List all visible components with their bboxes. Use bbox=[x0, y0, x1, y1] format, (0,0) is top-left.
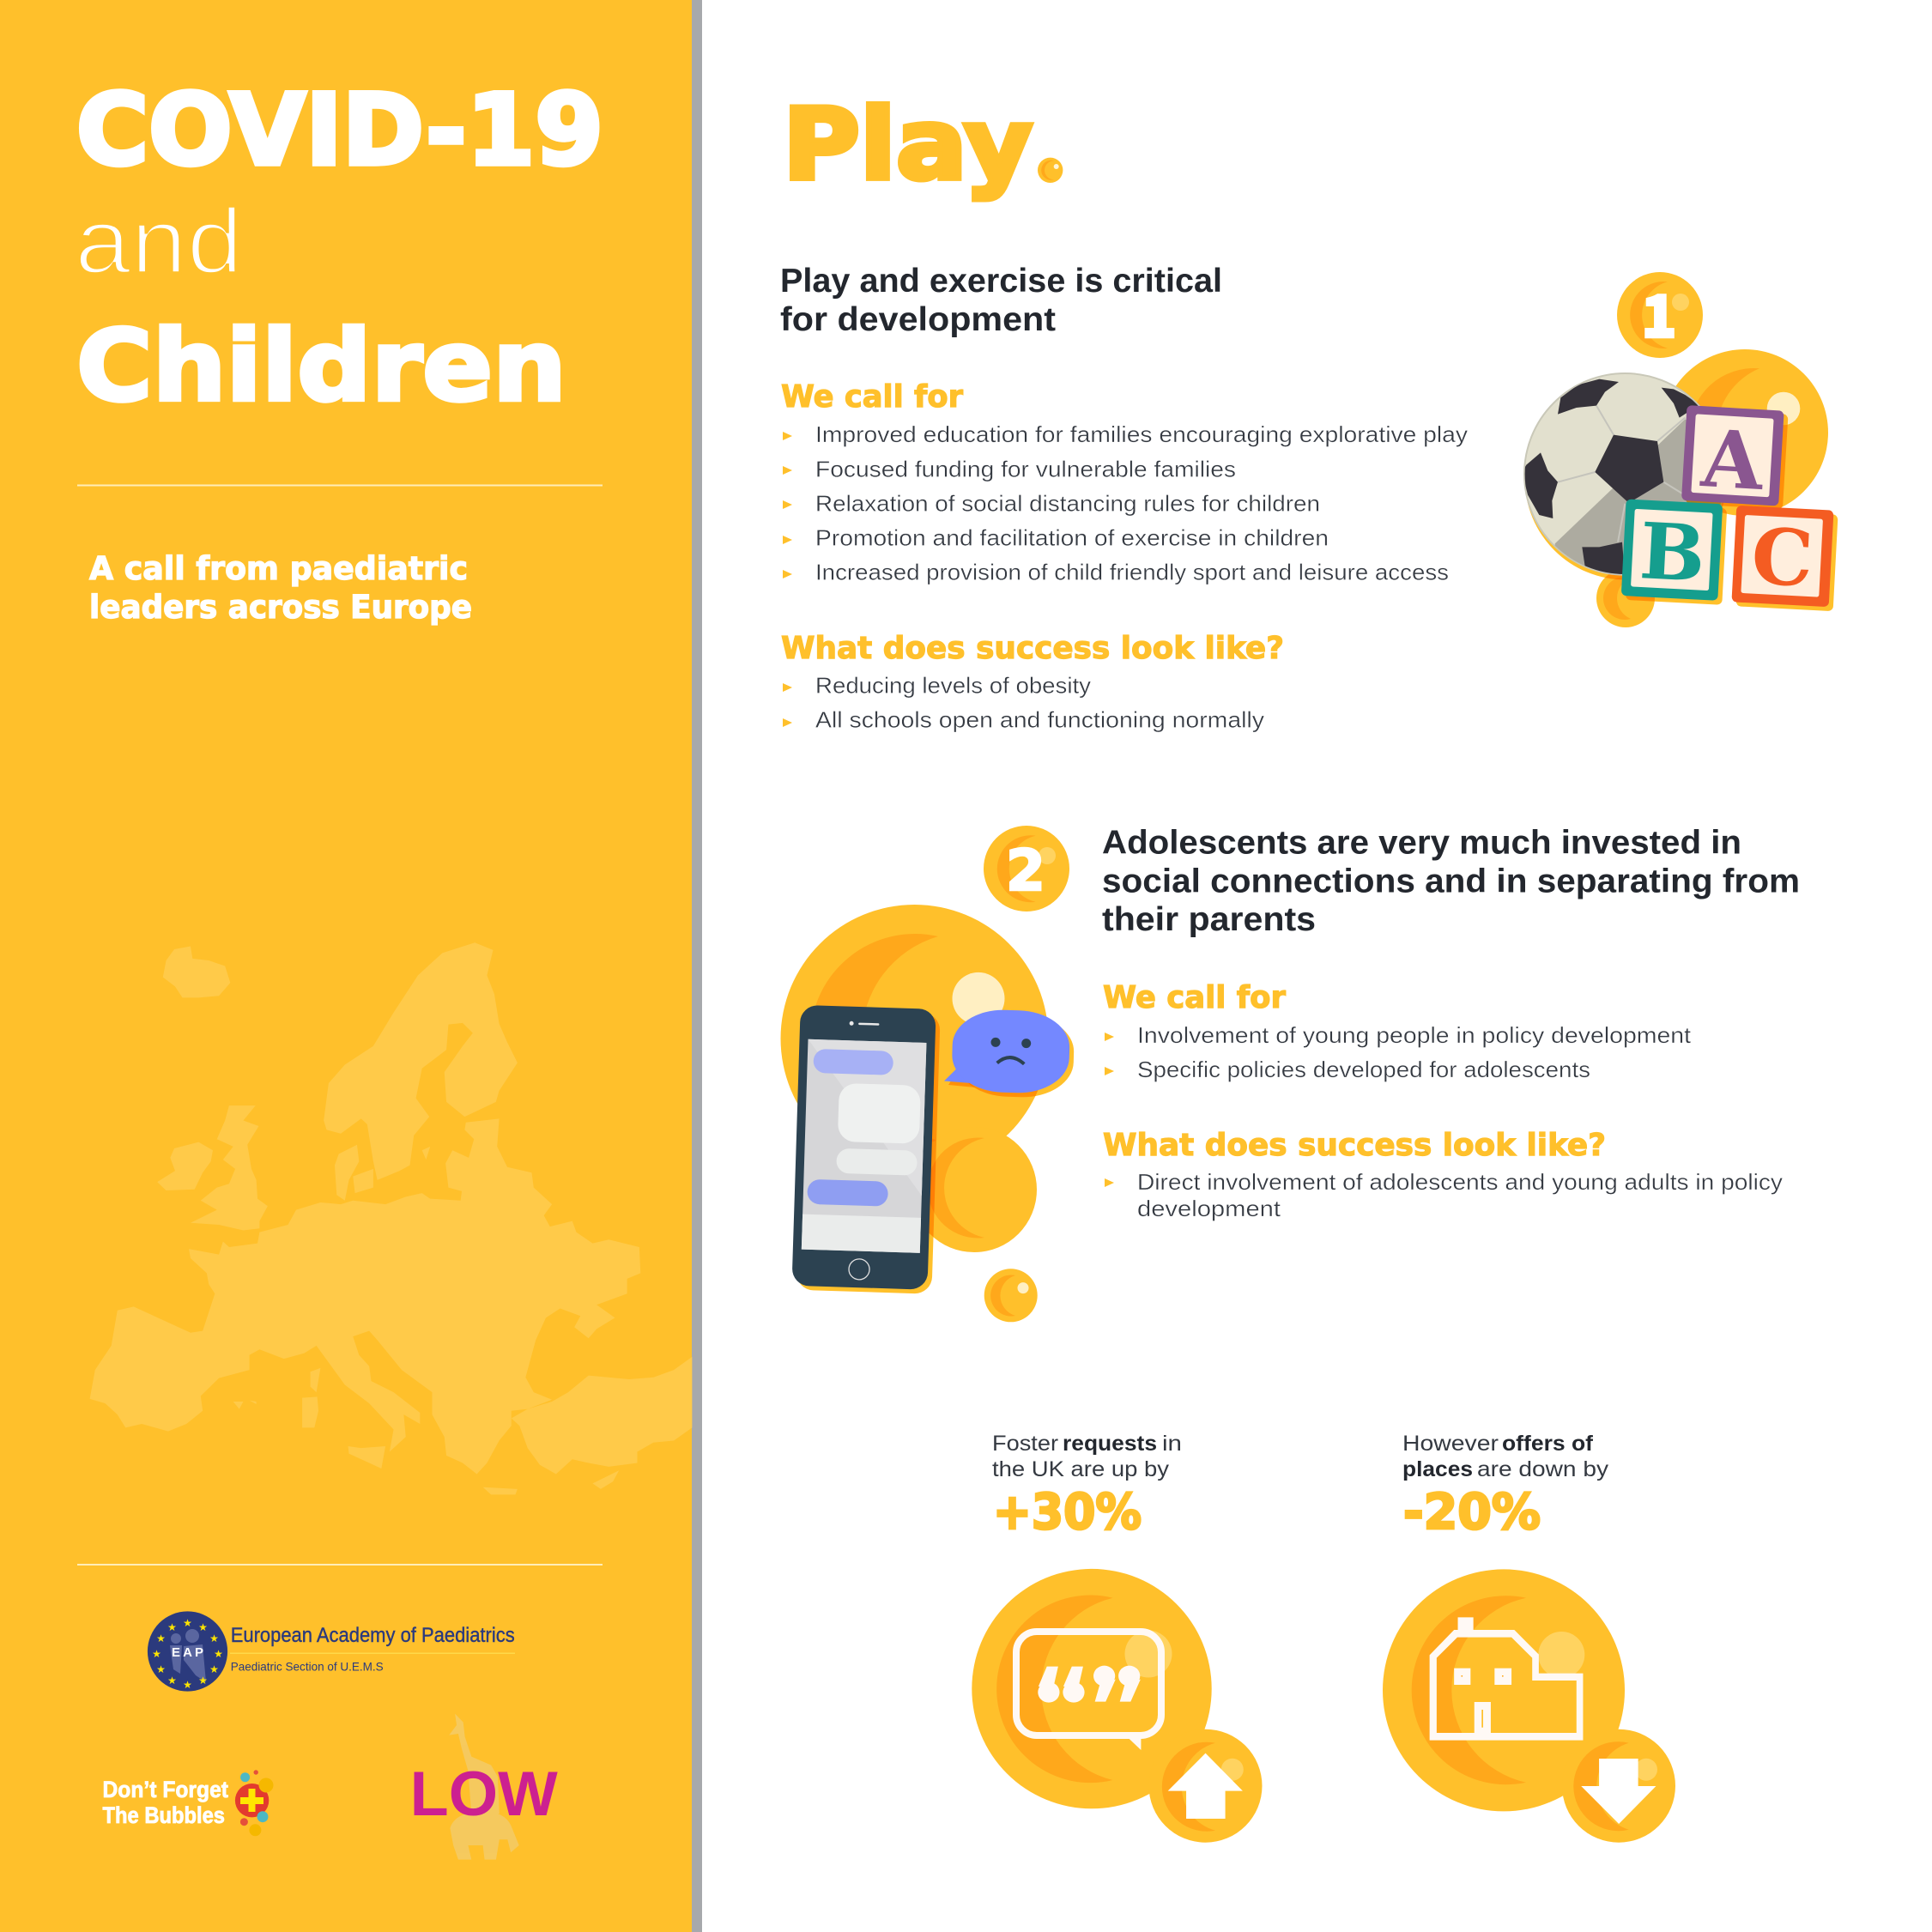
logo: European Academy of Paediatrics: ★ bbox=[183, 1679, 192, 1691]
icon: speech box with quotes and up arrow bbox=[972, 1569, 1262, 1843]
section 2 heading: social connections and in separating from bbox=[1102, 863, 1800, 899]
logo: European Academy of Paediatrics: ★ bbox=[183, 1617, 192, 1629]
foster places label bbox=[1402, 1432, 1609, 1481]
title: Children bbox=[76, 309, 566, 423]
subtitle: A call from paediatric bbox=[89, 550, 468, 587]
logo: European Academy of Paediatrics: ★ bbox=[198, 1621, 208, 1633]
section 1 call list: Promotion and facilitation of exercise in children bbox=[815, 525, 1329, 551]
subtitle bbox=[89, 550, 472, 626]
logo: European Academy of Paediatrics: ★ bbox=[156, 1663, 166, 1675]
title: and bbox=[75, 189, 243, 293]
foster requests label: the UK are up by bbox=[992, 1457, 1170, 1481]
badge: number 2: 2 bbox=[1006, 838, 1045, 904]
logo: European Academy of Paediatrics: ★ bbox=[152, 1648, 161, 1660]
block C bbox=[1731, 506, 1838, 611]
section 2 call list: Involvement of young people in policy development bbox=[1137, 1022, 1692, 1048]
logo: European Academy of Paediatrics: ★ bbox=[209, 1663, 219, 1675]
logo: European Academy of Paediatrics: ★ bbox=[214, 1648, 223, 1660]
statistic: foster places bbox=[1383, 1432, 1675, 1843]
icon: house and down arrow bbox=[1383, 1569, 1675, 1843]
logo: European Academy of Paediatrics: Paediatric Section of U.E.M.S bbox=[231, 1660, 384, 1674]
section 1 heading: Play and exercise is critical bbox=[780, 263, 1222, 300]
logo: European Academy of Paediatrics bbox=[148, 1611, 515, 1692]
section 1 we call for heading: We call for bbox=[781, 379, 963, 415]
section 2 success heading: What does success look like? bbox=[1103, 1128, 1606, 1163]
logo: LOW with giraffe and elephant bbox=[410, 1714, 558, 1860]
block B bbox=[1621, 499, 1727, 605]
logo: European Academy of Paediatrics: ★ bbox=[198, 1675, 208, 1687]
section 1 call list bbox=[783, 421, 1468, 585]
section 2 call list: Specific policies developed for adolescents bbox=[1137, 1057, 1590, 1082]
title bbox=[75, 73, 603, 423]
logo: Don't Forget The Bubbles: The Bubbles bbox=[103, 1802, 225, 1828]
statistic: foster requests bbox=[972, 1432, 1262, 1843]
section 2 heading: Adolescents are very much invested in bbox=[1102, 824, 1741, 862]
value: -20%: -20% bbox=[1403, 1484, 1541, 1541]
foster places label: However bbox=[1402, 1432, 1499, 1456]
block A: A bbox=[1699, 412, 1767, 508]
title: COVID-19 bbox=[76, 73, 603, 187]
foster requests label: Foster bbox=[992, 1432, 1058, 1456]
section 2 success list bbox=[1105, 1169, 1783, 1221]
block C: C bbox=[1749, 511, 1815, 605]
section 1 success list: Reducing levels of obesity bbox=[815, 673, 1091, 699]
logo: Don't Forget The Bubbles: Don’t Forget bbox=[103, 1777, 228, 1802]
logo: European Academy of Paediatrics: ★ bbox=[156, 1632, 166, 1644]
badge: number 1: 1 bbox=[1641, 270, 1677, 354]
left panel: title and logos bbox=[0, 0, 702, 1932]
map of Europe bbox=[90, 942, 692, 1494]
subtitle: leaders across Europe bbox=[89, 589, 472, 626]
section 2 heading bbox=[1102, 824, 1800, 938]
foster requests label: requests bbox=[1063, 1432, 1157, 1456]
foster places label: places bbox=[1402, 1457, 1473, 1481]
foster places label: are down by bbox=[1477, 1457, 1609, 1481]
section 1 call list: Improved education for families encouraging explorative play bbox=[815, 421, 1468, 447]
section 1 success list bbox=[783, 673, 1264, 733]
logo: European Academy of Paediatrics: EAP bbox=[172, 1645, 203, 1660]
foster requests label bbox=[992, 1432, 1182, 1481]
section 1 call list: Focused funding for vulnerable families bbox=[815, 457, 1236, 482]
block A bbox=[1681, 405, 1789, 510]
logo: Don't Forget The Bubbles bbox=[103, 1770, 273, 1836]
section 2 we call for heading: We call for bbox=[1103, 980, 1286, 1015]
section 2 heading: their parents bbox=[1102, 901, 1316, 938]
section 1 call list: Increased provision of child friendly sport and leisure access bbox=[815, 560, 1449, 585]
value: +30%: +30% bbox=[993, 1484, 1142, 1541]
football bbox=[1523, 372, 1723, 576]
section 2 call list bbox=[1105, 1022, 1692, 1082]
section 1 text bbox=[780, 263, 1468, 733]
section 2 success list: Direct involvement of adolescents and young adults in policy bbox=[1137, 1169, 1783, 1195]
section 1 heading bbox=[780, 263, 1222, 338]
speech bubble: sad face bbox=[944, 1008, 1070, 1094]
section 2 text bbox=[1102, 824, 1800, 1221]
badge: number 2 bbox=[984, 826, 1069, 911]
block B: B bbox=[1638, 506, 1707, 600]
section 1 heading: for development bbox=[780, 301, 1056, 338]
section 1 call list: Relaxation of social distancing rules for children bbox=[815, 491, 1320, 517]
section 1 success list: All schools open and functioning normally bbox=[815, 707, 1264, 733]
foster places label: offers of bbox=[1502, 1432, 1594, 1456]
foster requests label: in bbox=[1162, 1432, 1182, 1456]
phone bbox=[792, 1005, 936, 1290]
heading: Play: Play bbox=[783, 88, 1033, 202]
logo: European Academy of Paediatrics: European Academy of Paediatrics bbox=[231, 1624, 515, 1647]
section 2 success list: development bbox=[1137, 1196, 1281, 1221]
illustration: number 1, football and ABC blocks bbox=[1522, 270, 1838, 627]
logo: European Academy of Paediatrics: ★ bbox=[167, 1621, 177, 1633]
section 1 success heading: What does success look like? bbox=[781, 631, 1284, 666]
logo: European Academy of Paediatrics: ★ bbox=[167, 1675, 177, 1687]
logo: European Academy of Paediatrics: ★ bbox=[209, 1632, 219, 1644]
logo: LOW with giraffe and elephant: LOW bbox=[410, 1759, 558, 1829]
badge: number 1 bbox=[1617, 270, 1703, 358]
illustration: number 2, phone and sad speech bubble bbox=[781, 826, 1075, 1322]
